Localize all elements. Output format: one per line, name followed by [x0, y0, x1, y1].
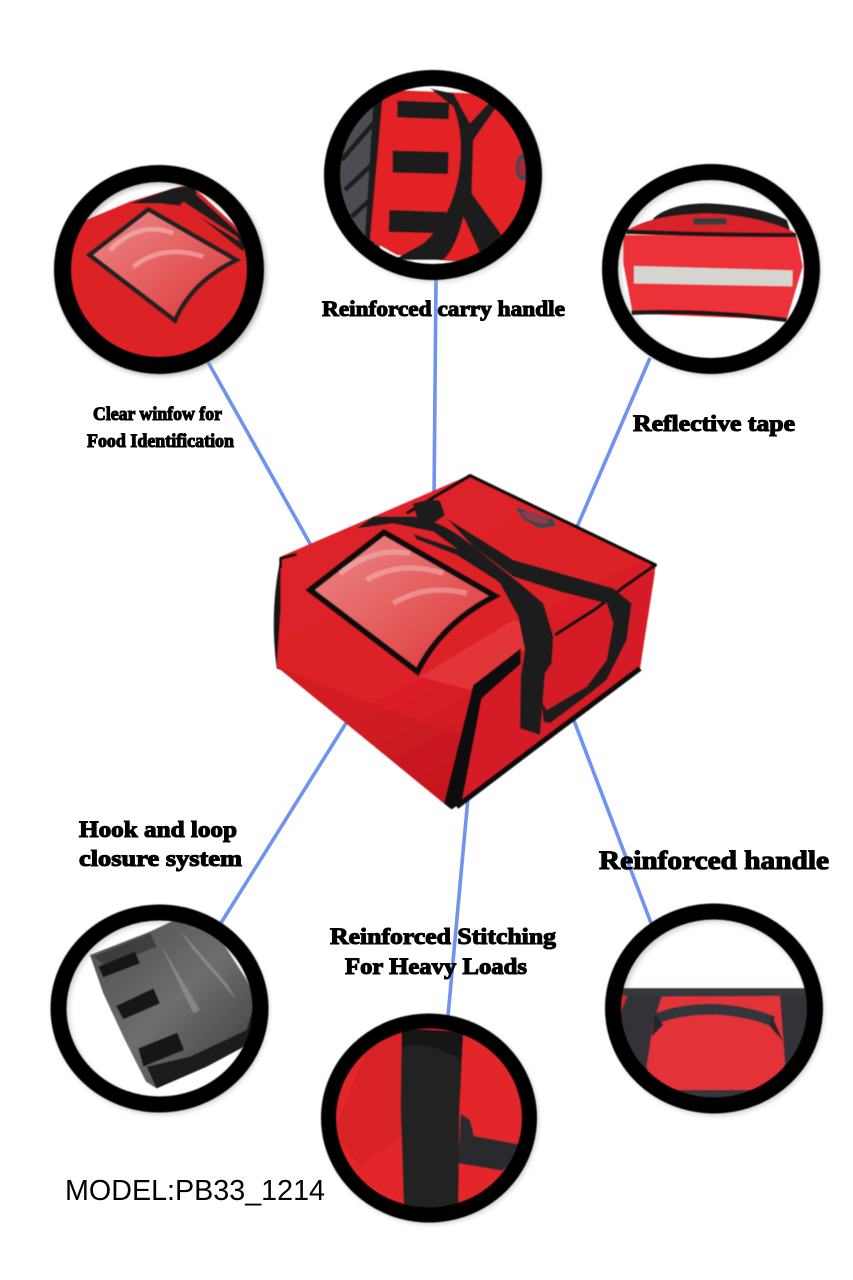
handle strap: [393, 88, 502, 260]
ring: [610, 172, 812, 366]
panel: clear window detail: [60, 174, 260, 368]
top binding: [622, 988, 805, 996]
window: [89, 209, 237, 321]
ring: [58, 912, 260, 1104]
ring shadow: [335, 80, 535, 274]
red bag surface: [70, 185, 248, 358]
carry straps: [357, 517, 632, 735]
label: clear window: Food Identification: [87, 431, 234, 452]
panel: reinforced handle detail: [613, 912, 816, 1108]
red fabric: [335, 1028, 523, 1205]
corner piping band: [444, 648, 521, 809]
panel: reflective tape detail: [610, 172, 813, 368]
panel: hook and loop detail: [58, 912, 261, 1107]
panel: carry handle detail: [332, 78, 547, 274]
label: clear window: Clear winfow for: [93, 404, 223, 425]
ring: [328, 1021, 530, 1215]
straps: [130, 185, 247, 252]
label: hook and loop closure system: closure system: [79, 846, 242, 871]
dark mesh sides: [618, 988, 810, 1102]
piping: [626, 232, 796, 235]
strap knot: [413, 500, 445, 523]
central product: red pizza bag: [274, 475, 656, 809]
ring: [62, 174, 256, 366]
ring shadow: [613, 174, 813, 368]
ring shadow: [616, 914, 816, 1108]
label: reinforced stitching: [330, 924, 557, 979]
ring: [613, 912, 815, 1106]
label: reinforced stitching: For Heavy Loads: [345, 954, 527, 979]
connector lines: [208, 279, 651, 1016]
ring shadow: [61, 915, 261, 1107]
label: reinforced stitching: Reinforced Stitching: [330, 924, 557, 949]
clear window: [310, 532, 495, 672]
bag logo badge: [515, 507, 556, 528]
side handle: [458, 1113, 523, 1171]
label: reinforced handle: Reinforced handle: [599, 846, 829, 875]
reflective strip: [634, 266, 793, 286]
bag body: [277, 475, 656, 808]
ring shadow: [64, 176, 258, 368]
bag piping: [281, 476, 655, 807]
label: hook and loop closure system: [79, 817, 242, 871]
bag corner highlight: [420, 620, 553, 690]
vertical strap: [401, 1028, 463, 1210]
label: clear window: [87, 404, 234, 452]
bag left mesh side: [274, 558, 290, 673]
bottom binding: [673, 1091, 750, 1103]
bag right side panel: [457, 572, 655, 803]
velcro strips: [98, 952, 140, 977]
red center: [620, 994, 628, 1013]
label: hook and loop closure system: Hook and loop: [79, 817, 237, 842]
panel: reinforced stitching detail: [327, 1020, 533, 1217]
label: [693, 218, 727, 225]
bag front: [623, 235, 803, 320]
velcro strips: [397, 101, 449, 119]
label: reinforced carry handle: Reinforced carry handle: [322, 296, 565, 321]
insulated flap: [90, 918, 257, 1088]
bag interior and red panels: [379, 86, 472, 262]
badge: [516, 154, 529, 181]
handle behind: [650, 203, 790, 230]
ring shadow: [331, 1023, 531, 1217]
handle: [657, 1009, 773, 1022]
ring: [332, 78, 534, 272]
label: reflective tape: Reflective tape: [633, 411, 795, 436]
model number: MODEL:PB33_1214: [65, 1175, 325, 1207]
bag top: [628, 212, 794, 234]
bag front shading: [277, 667, 460, 808]
